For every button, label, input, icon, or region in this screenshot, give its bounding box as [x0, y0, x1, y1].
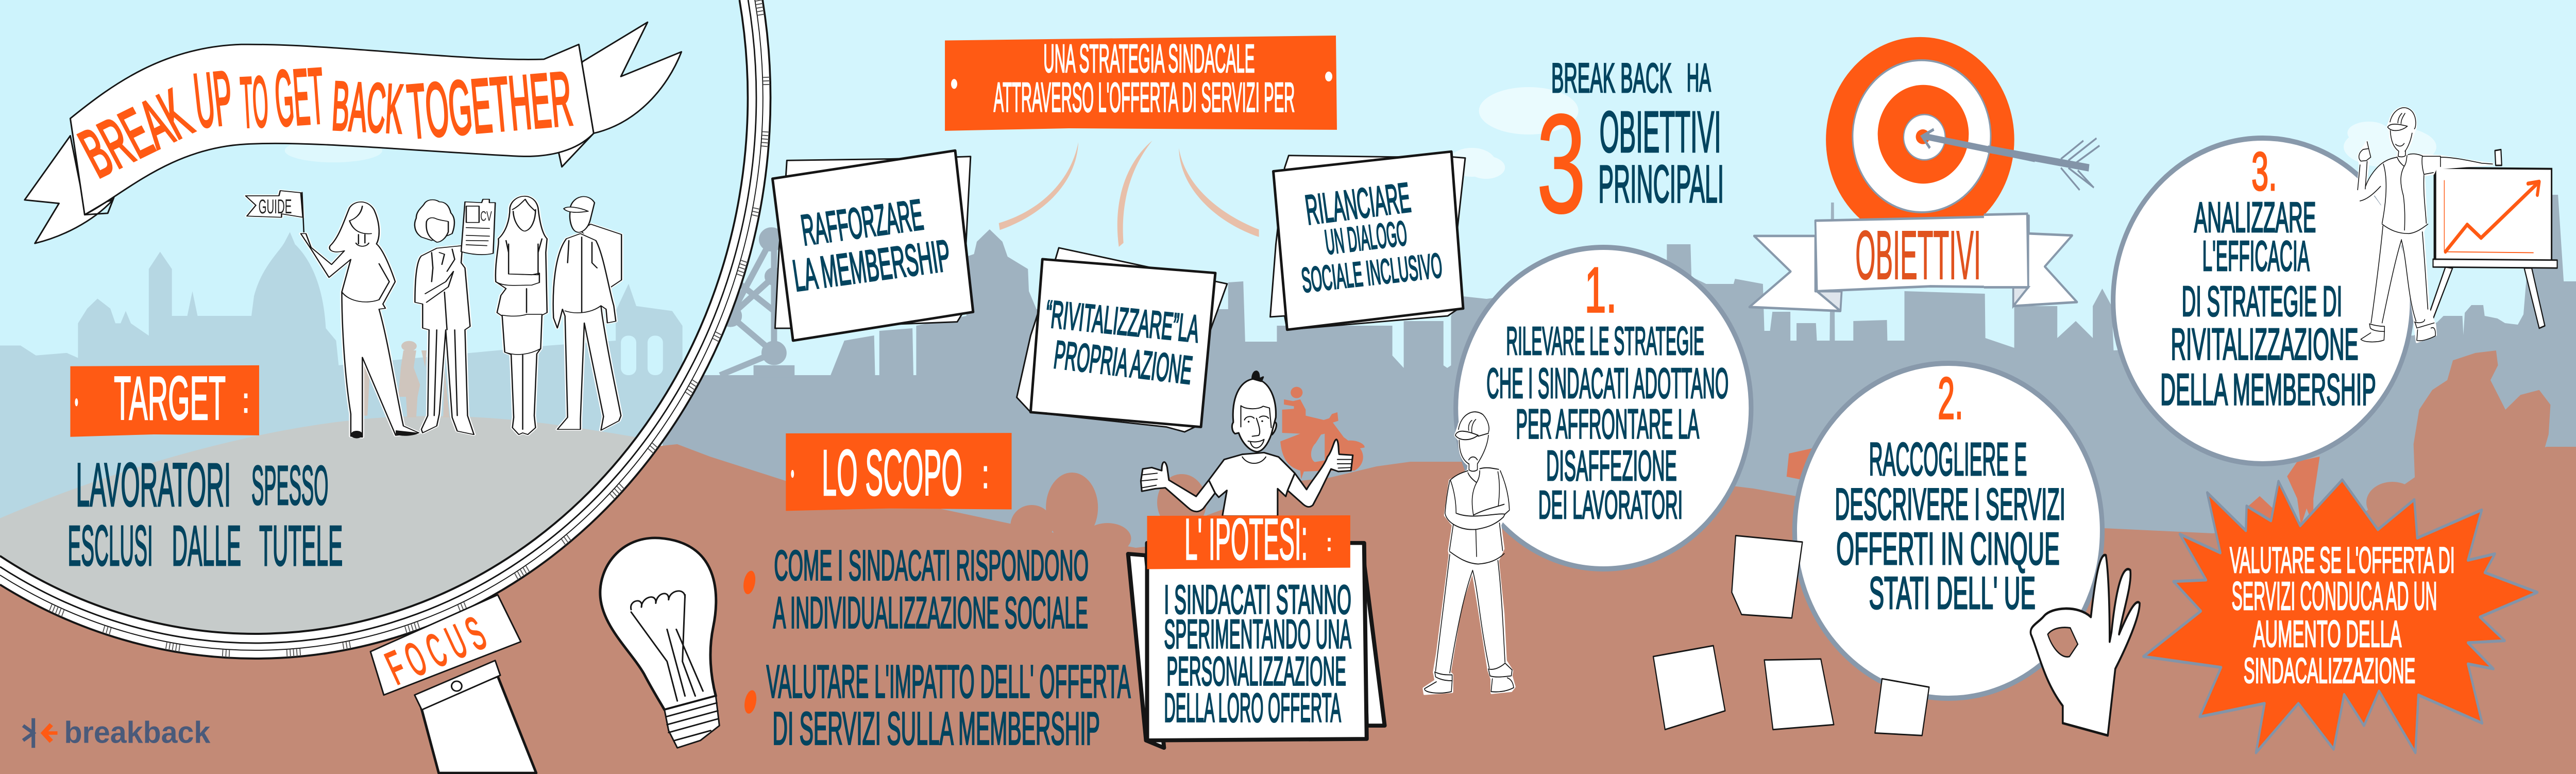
centre section drawn in zoom coordinates: “RIVITALIZZARE”LA	[1043, 293, 1201, 351]
objective 1 text: DISAFFEZIONE	[1546, 442, 1677, 490]
background: grey city skyline	[663, 195, 2576, 593]
card: rafforzare: RAFFORZARE	[798, 191, 926, 255]
target label box: :	[242, 381, 249, 420]
focus tag: S	[458, 607, 493, 660]
hypothesis note: :	[1327, 531, 1332, 556]
target description text: LAVORATORI	[76, 450, 231, 519]
objective 1 text: 1.	[1585, 254, 1617, 326]
left section drawn in zoom coordinates: SPESSO	[251, 455, 328, 517]
arrow tail	[1988, 138, 2099, 190]
title ribbon	[25, 22, 682, 243]
objective 3 text: DI STRATEGIE DI	[2182, 278, 2342, 325]
title ribbon: TOGETHER	[404, 56, 575, 155]
figure: courier with box	[553, 196, 621, 430]
ribbon right tail	[1984, 214, 2077, 306]
magnifying glass handle	[370, 595, 536, 773]
lo scopo box: LO SCOPO	[822, 436, 962, 509]
left section drawn in zoom coordinates	[23, 22, 719, 773]
centre section drawn in zoom coordinates: ATTRAVERSO L'OFFERTA DI SERVIZI PER	[994, 75, 1295, 121]
objective 2 text: DESCRIVERE I SERVIZI	[1835, 480, 2065, 529]
sticky notes	[1653, 535, 1929, 735]
background: brown ground	[0, 444, 2576, 774]
objective 1 text: PER AFFRONTARE LA	[1516, 401, 1699, 447]
objective 3 text: L'EFFICACIA	[2202, 232, 2310, 280]
target description text: DALLE	[172, 514, 241, 577]
title text: BACK	[330, 67, 405, 147]
centre section drawn in zoom coordinates	[742, 36, 1465, 754]
heading: breakback ha 3 obiettivi principali	[1537, 55, 1724, 243]
title text: BREAK	[68, 75, 202, 192]
figure: woman with folder	[496, 196, 547, 434]
obiettivi ribbon	[1750, 216, 2029, 311]
card: rivitalizzare: PROPRIA AZIONE	[1052, 332, 1195, 393]
figure: man with CV: CV	[480, 209, 492, 224]
lo scopo box	[786, 433, 1012, 511]
figure: worker presenting chart	[2358, 108, 2493, 342]
flip chart	[2428, 149, 2557, 328]
heading: breakback ha 3 obiettivi principali: BREAK BACK	[1551, 55, 1672, 102]
card: rivitalizzare	[1016, 248, 1227, 432]
hypothesis note	[1128, 507, 1385, 748]
objective 2 text: OFFERTI IN CINQUE	[1836, 524, 2060, 574]
magnifying glass rim	[0, 0, 771, 659]
centre section drawn in zoom coordinates: LA MEMBERSHIP	[790, 230, 954, 301]
title text: GET	[272, 52, 327, 143]
objective 2 text: STATI DELL' UE	[1869, 568, 2036, 618]
people group drawn in crop coordinates: GUIDE	[259, 195, 292, 218]
background: distant bushes	[974, 350, 2550, 557]
text: SPERIMENTANDO UNA	[1164, 611, 1351, 657]
aim bullet list	[742, 542, 1131, 754]
text: SOCIALE INCLUSIVO	[1299, 246, 1444, 300]
text: DELLA LORO OFFERTA	[1164, 685, 1341, 730]
objective 1 text	[1486, 254, 1728, 527]
objective 3 text: 3.	[2251, 141, 2277, 201]
figure: smiling man with thumbs up	[1141, 372, 1353, 516]
focus tag: C	[418, 624, 454, 677]
heading: breakback ha 3 obiettivi principali: HA	[1687, 55, 1711, 100]
background: distant scooter rider silhouette	[1280, 387, 1365, 479]
focus tag: O	[397, 632, 434, 686]
arrows from heading to cards	[999, 141, 1259, 247]
title text	[68, 52, 575, 192]
objective 3 text: ANALIZZARE	[2194, 194, 2316, 241]
target label box	[70, 363, 259, 437]
target icon	[1826, 37, 2035, 242]
card: rafforzare	[772, 150, 973, 341]
target description text	[67, 450, 343, 577]
objectives section drawn in zoom coordinates	[1486, 37, 2035, 735]
card: rilanciare: UN DIALOGO	[1323, 214, 1409, 262]
focus tag	[370, 595, 521, 695]
strategy heading box: UNA STRATEGIA SINDACALE	[1043, 36, 1255, 81]
figure: woman with flag	[301, 202, 419, 439]
centre section drawn in zoom coordinates: A INDIVIDUALIZZAZIONE SOCIALE	[773, 587, 1088, 637]
people group drawn in crop coordinates	[246, 191, 621, 439]
background: distant walker with dog silhouette	[2248, 457, 2320, 526]
background: atomium silhouette	[719, 228, 794, 378]
icon: OK hand	[2030, 555, 2140, 735]
objective 3 text	[2160, 141, 2376, 415]
callout burst: AUMENTO DELLA	[2253, 612, 2401, 655]
callout burst: SINDACALIZZAZIONE	[2244, 651, 2415, 690]
circle: objective 1	[1456, 247, 1751, 569]
strategy heading box	[945, 36, 1337, 131]
obiettivi ribbon: OBIETTIVI	[1855, 216, 1981, 294]
heading: breakback ha 3 obiettivi principali: OBIETTIVI	[1600, 99, 1721, 164]
figure: worker with crossed arms	[1423, 412, 1515, 694]
objective 2 text	[1835, 434, 2065, 618]
heading: breakback ha 3 obiettivi principali: 3	[1537, 86, 1586, 243]
objective 1 text: DEI LAVORATORI	[1538, 482, 1683, 527]
objective 1 text: RILEVARE LE STRATEGIE	[1506, 318, 1704, 363]
objective 3 text: DELLA MEMBERSHIP	[2160, 365, 2376, 415]
text: PERSONALIZZAZIONE	[1166, 648, 1346, 694]
hypothesis note: L' IPOTESI:	[1184, 507, 1308, 572]
guide flag	[246, 191, 304, 233]
circle: objective 3	[2113, 138, 2412, 464]
objective 1 text: CHE I SINDACATI ADOTTANO	[1486, 360, 1728, 407]
callout burst	[2143, 480, 2537, 753]
objective 2 text: RACCOGLIERE E	[1869, 434, 2027, 485]
figure: man with CV	[415, 199, 495, 434]
logo: breakback: breakback	[64, 715, 211, 749]
left section drawn in zoom coordinates: TUTELE	[259, 514, 343, 577]
title text: UP	[190, 55, 236, 144]
magnifying glass lens: inside scene	[0, 144, 683, 633]
background: clouds	[1448, 87, 2436, 179]
circle: objective 2	[1794, 363, 2102, 698]
target description text: ESCLUSI	[67, 514, 153, 577]
hypothesis note: I SINDACATI STANNO	[1164, 577, 1351, 622]
card: rilanciare	[1270, 152, 1465, 330]
small scooter fragment	[1787, 448, 1812, 482]
card: rilanciare: RILANCIARE	[1302, 174, 1413, 233]
lo scopo box: :	[982, 452, 989, 496]
icon: light bulb	[600, 538, 719, 748]
centre section drawn in zoom coordinates: COME I SINDACATI RISPONDONO	[774, 542, 1089, 589]
right section drawn in zoom coordinates	[1984, 138, 2557, 753]
focus tag: U	[438, 615, 474, 669]
title text: TO	[239, 62, 270, 143]
objective 2 number: 2.	[1938, 365, 1963, 432]
heading: breakback ha 3 obiettivi principali: PRINCIPALI	[1598, 154, 1724, 214]
objective 3 text: RIVITALIZZAZIONE	[2171, 320, 2359, 369]
centre section drawn in zoom coordinates: VALUTARE L'IMPATTO DELL' OFFERTA	[766, 656, 1131, 708]
target label box: TARGET	[114, 363, 226, 433]
centre section drawn in zoom coordinates: DI SERVIZI SULLA MEMBERSHIP	[772, 703, 1100, 754]
focus tag: F	[378, 641, 414, 694]
